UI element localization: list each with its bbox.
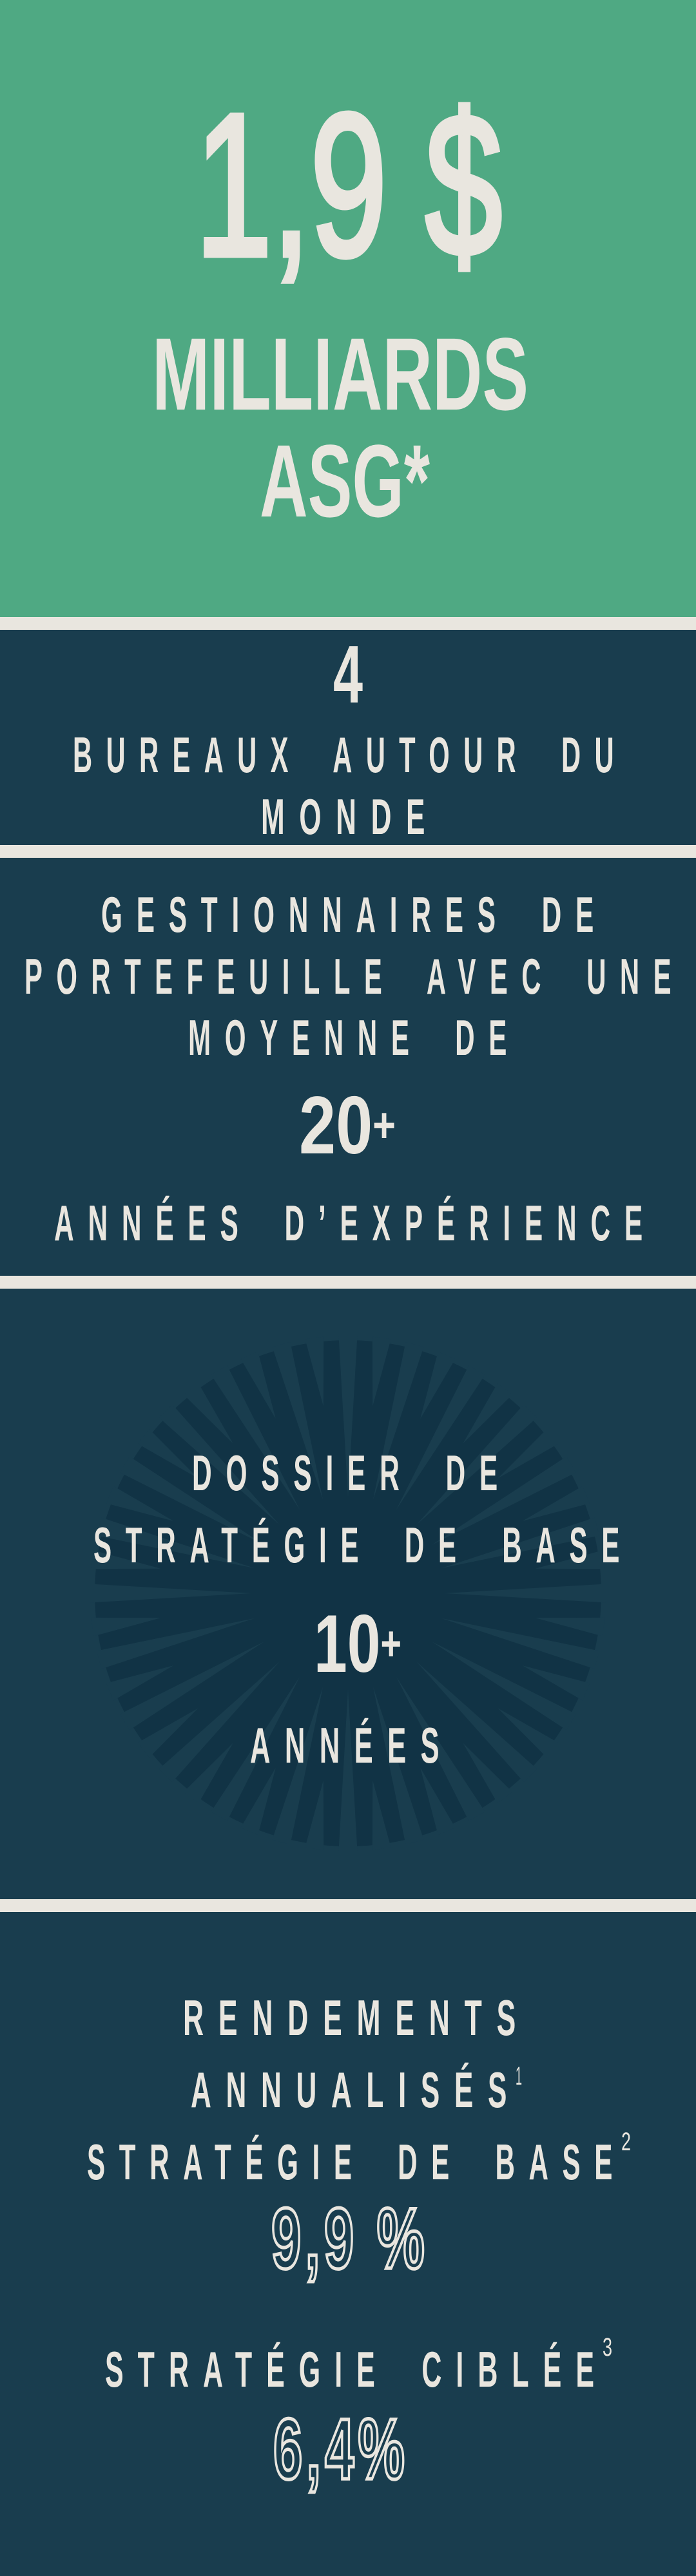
big number: 1,9 $ [195, 71, 502, 298]
footnote mark 3: 3 [603, 2333, 612, 2362]
text: gestionnaires de portefeuille [24, 886, 685, 1066]
panel: annualized returns [0, 1912, 696, 2576]
text: années: ANNÉES [250, 1717, 454, 1774]
panel: track record [0, 1280, 696, 1906]
number: 4: 4 [333, 629, 363, 720]
panel: portfolio managers [0, 858, 696, 1276]
number: 20+: 20 [299, 1079, 390, 1171]
text: bureaux autour du monde [73, 726, 628, 845]
heading: rendements annualisés: 1 [516, 2062, 522, 2090]
text: dossier de stratégie de base [93, 1444, 633, 1573]
number: 10+: + [380, 1616, 401, 1671]
value: 9,9 %: 9,9 % [271, 2191, 429, 2287]
panel: offices [0, 629, 696, 845]
text: bureaux autour du monde: MONDE [261, 788, 440, 845]
panel: assets under management [0, 0, 696, 617]
number: 10+: 10 [314, 1598, 405, 1689]
heading: rendements annualisés [183, 1989, 530, 2118]
value: 6,4%: 6,4% [273, 2401, 409, 2497]
footnote mark 2: 2 [621, 2128, 631, 2156]
number: 20+: + [372, 1098, 396, 1153]
heading: ASG: ASG* [260, 423, 430, 538]
icon: sunburst [19, 1280, 677, 1906]
